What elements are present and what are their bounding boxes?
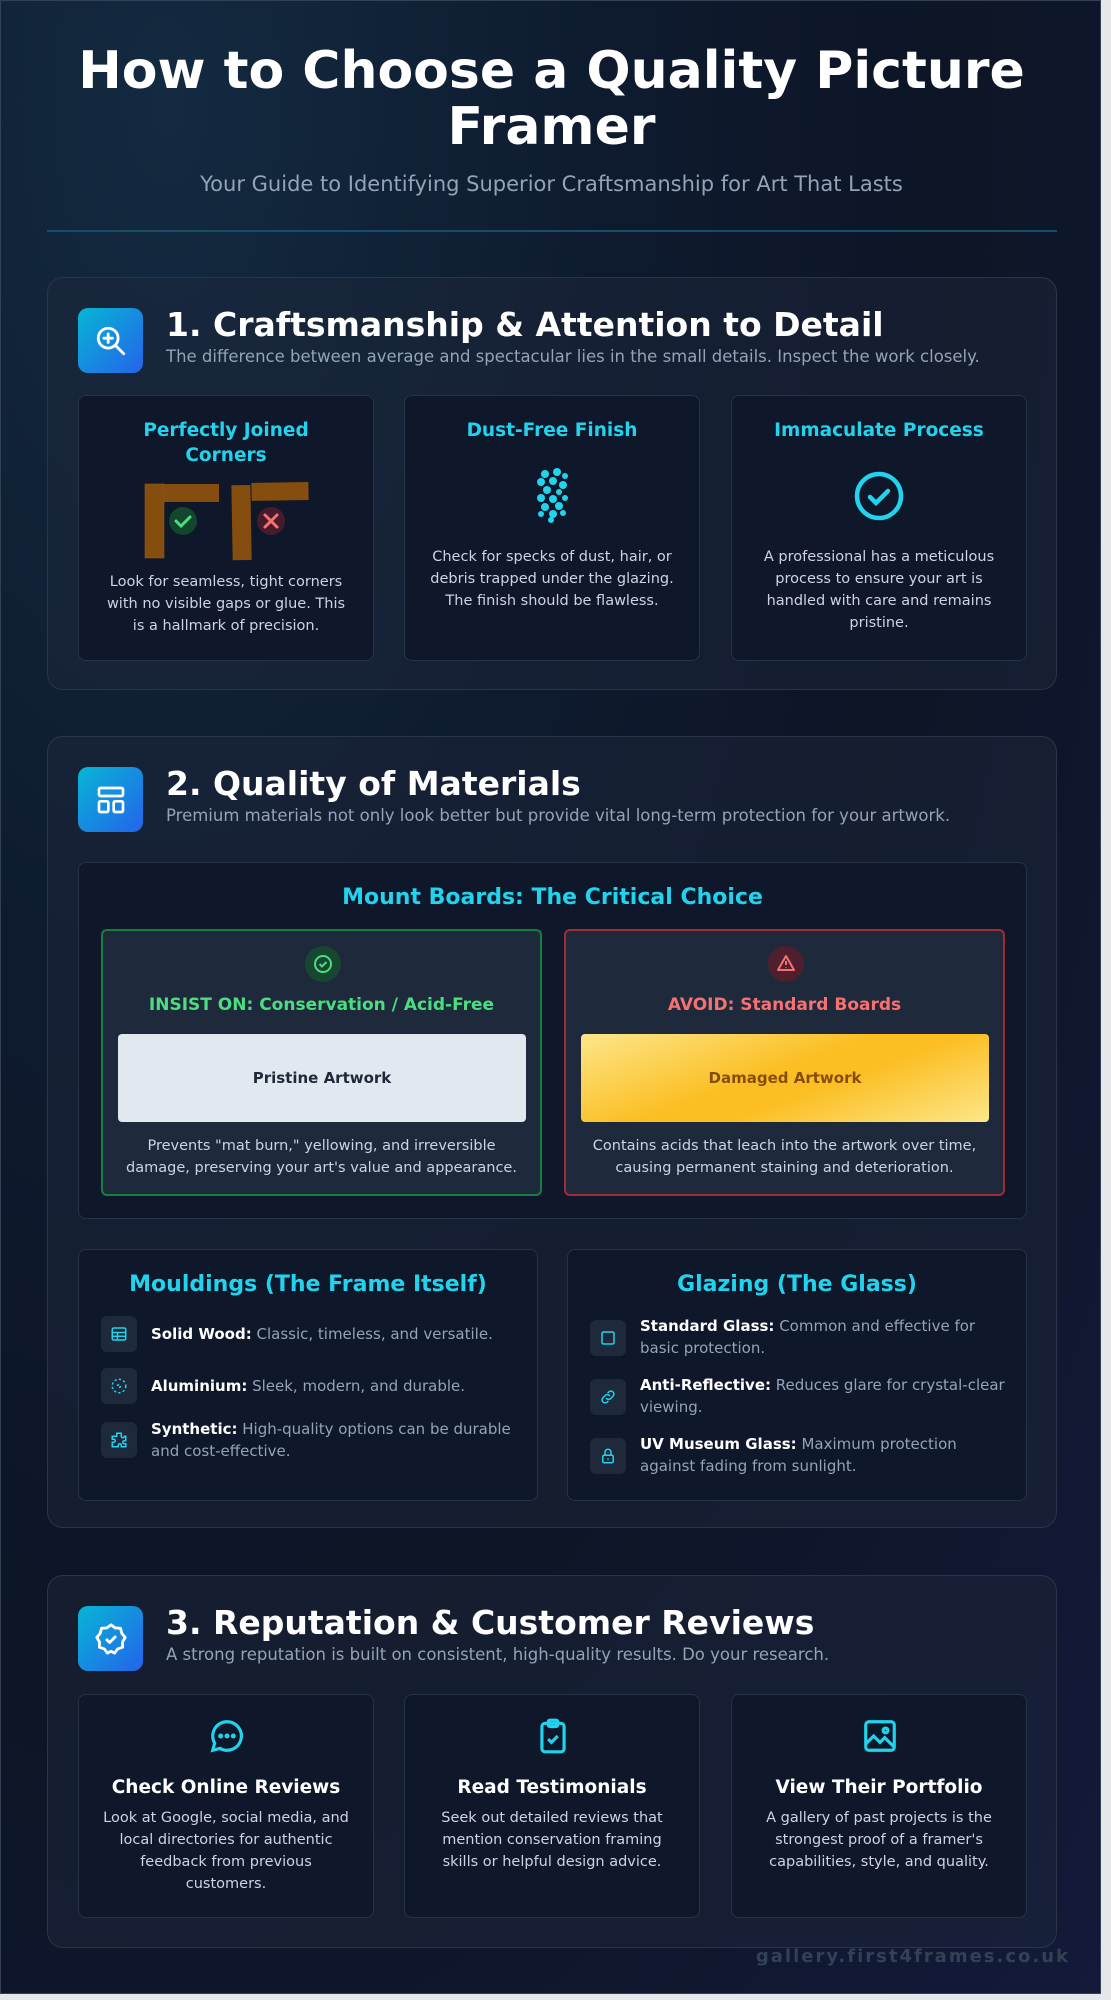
mouldings box: Synthetic: High-quality options can be durable and cost-effective. — [151, 1420, 511, 1460]
bad board panel: Contains acids that leach into the artwork over time, causing permanent staining and deterioration. — [593, 1138, 976, 1176]
icon: magnifier — [78, 308, 143, 373]
description 3: A strong reputation is built on consistent, high-quality results. Do your research. — [166, 1645, 829, 1664]
glazing box — [567, 1249, 1027, 1501]
icon: image — [864, 1720, 896, 1752]
item: uv museum glass — [590, 1438, 626, 1474]
card: portfolio: View Their Portfolio — [775, 1777, 983, 1798]
description 1: The difference between average and spectacular lies in the small details. Inspect the work closely. — [166, 347, 980, 366]
pristine artwork sample — [118, 1034, 526, 1122]
icon: layout — [78, 767, 143, 832]
title: Framer — [447, 97, 656, 157]
mouldings box: Mouldings (The Frame Itself) — [129, 1272, 487, 1297]
panel: materials — [47, 736, 1057, 1528]
glazing box: UV Museum Glass: Maximum protection against fading from sunlight. — [640, 1435, 957, 1475]
title: How to Choose a Quality Picture — [78, 41, 1025, 101]
glazing box: Anti-Reflective: Reduces glare for crystal-clear viewing. — [640, 1376, 1005, 1416]
icon: badge check — [78, 1606, 143, 1671]
heading 3: 3. Reputation & Customer Reviews — [166, 1603, 814, 1642]
description 2: Premium materials not only look better but provide vital long-term protection for your artwork. — [166, 806, 950, 825]
card: corners: Corners — [185, 445, 267, 466]
mouldings box — [78, 1249, 538, 1501]
card: dust-free: Check for specks of dust, hair, or debris trapped under the glazing. The finish should be flawless. — [430, 549, 674, 609]
mount boards box — [78, 862, 1027, 1219]
icon: green check — [305, 946, 341, 982]
card: dust-free — [404, 395, 700, 661]
card: immaculate — [731, 395, 1027, 661]
icon: corner samples — [144, 482, 309, 560]
glazing box: Glazing (The Glass) — [677, 1272, 917, 1297]
subtitle: Your Guide to Identifying Superior Craftsmanship for Art That Lasts — [200, 172, 903, 196]
damaged artwork sample — [581, 1034, 989, 1122]
panel: reputation — [47, 1575, 1057, 1948]
card: immaculate: Immaculate Process — [774, 420, 984, 441]
card: corners: Perfectly Joined — [143, 420, 309, 441]
good board panel — [101, 929, 542, 1196]
mouldings box: Solid Wood: Classic, timeless, and versatile. — [151, 1325, 493, 1343]
bad board panel: AVOID: Standard Boards — [668, 995, 901, 1015]
card: corners — [78, 395, 374, 661]
card: online reviews: Check Online Reviews — [112, 1777, 340, 1798]
item: standard glass — [590, 1320, 626, 1356]
card: testimonials: Seek out detailed reviews that mention conservation framing skills or helpful design advice. — [441, 1810, 663, 1870]
mouldings box: Aluminium: Sleek, modern, and durable. — [151, 1377, 465, 1395]
panel: craftsmanship — [47, 277, 1057, 690]
icon: clipboard check — [540, 1718, 566, 1754]
mount boards title: Mount Boards: The Critical Choice — [342, 885, 763, 910]
good board panel: INSIST ON: Conservation / Acid-Free — [149, 995, 494, 1015]
icon: chat bubble — [210, 1720, 243, 1752]
card: testimonials: Read Testimonials — [457, 1777, 647, 1798]
glazing box: Standard Glass: Common and effective for basic protection. — [640, 1317, 975, 1357]
bad board panel — [564, 929, 1005, 1196]
item: aluminium — [101, 1368, 137, 1404]
heading 2: 2. Quality of Materials — [166, 764, 581, 803]
item: synthetic — [101, 1422, 137, 1458]
card: dust-free: Dust-Free Finish — [467, 420, 637, 441]
card: online reviews: Look at Google, social media, and local directories for authentic feedback from previous customers. — [103, 1810, 349, 1892]
card: online reviews — [78, 1694, 374, 1918]
card: portfolio — [731, 1694, 1027, 1918]
item: solid wood — [101, 1316, 137, 1352]
damaged artwork sample: Damaged Artwork — [709, 1069, 861, 1087]
card: corners: Look for seamless, tight corners with no visible gaps or glue. This is a hallmark of precision. — [107, 574, 345, 634]
title — [78, 41, 1025, 157]
pristine artwork sample: Pristine Artwork — [253, 1069, 391, 1087]
footer: website: gallery.first4frames.co.uk — [756, 1946, 1070, 1967]
item: anti-reflective — [590, 1379, 626, 1415]
icon: warning — [768, 946, 804, 982]
good board panel: Prevents "mat burn," yellowing, and irreversible damage, preserving your art's value and appearance. — [126, 1138, 517, 1176]
card: testimonials — [404, 1694, 700, 1918]
card: immaculate: A professional has a meticulous process to ensure your art is handled with care and remains pristine. — [764, 549, 994, 631]
icon: check circle — [854, 472, 904, 520]
card: portfolio: A gallery of past projects is the strongest proof of a framer's capabilities, style, and quality. — [766, 1810, 992, 1870]
heading 1: 1. Craftsmanship & Attention to Detail — [166, 305, 884, 344]
icon: dust particles — [537, 468, 568, 523]
